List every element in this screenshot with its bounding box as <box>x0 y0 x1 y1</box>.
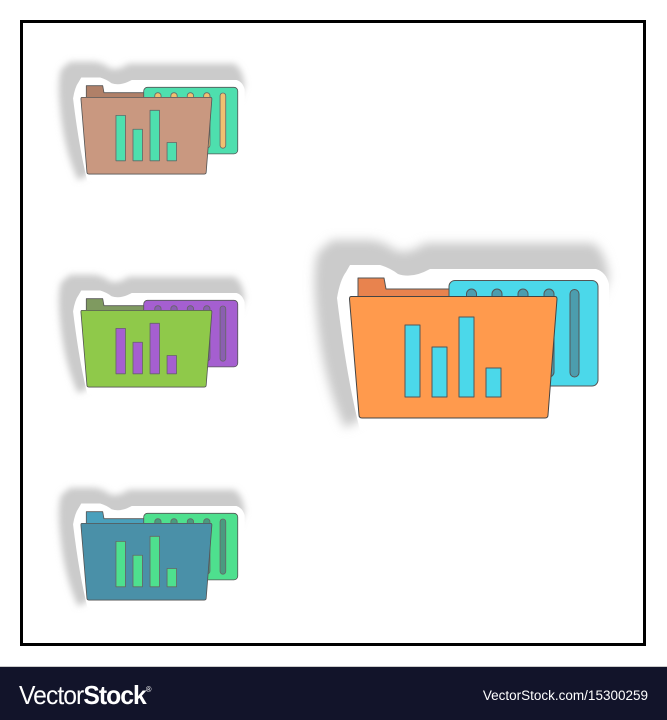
icon: brown folder with green card <box>59 62 245 182</box>
icon: large orange folder <box>314 240 609 430</box>
VectorStock logo: VectorStock® <box>19 680 151 710</box>
image id url: VectorStock.com/15300259 <box>483 688 648 703</box>
icon: teal folder with green card <box>59 488 245 608</box>
icon: green folder with purple card <box>59 275 245 395</box>
footer bar <box>0 666 667 720</box>
